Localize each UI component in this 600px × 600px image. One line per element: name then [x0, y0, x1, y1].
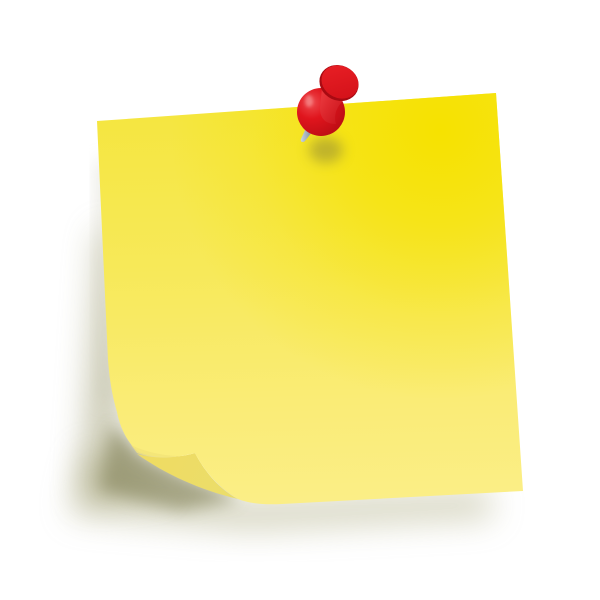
yellow note paper [97, 93, 523, 504]
pin cap [313, 59, 365, 107]
paper shadow [70, 160, 492, 530]
pin ball [297, 88, 345, 136]
curled corner underside [137, 453, 238, 499]
pin neck [320, 88, 346, 124]
note bright glow [97, 93, 523, 504]
pin shadow [309, 137, 343, 163]
pin highlight [305, 95, 313, 107]
pin needle [301, 128, 312, 142]
pushpin [297, 59, 365, 163]
curl highlight [131, 445, 180, 458]
